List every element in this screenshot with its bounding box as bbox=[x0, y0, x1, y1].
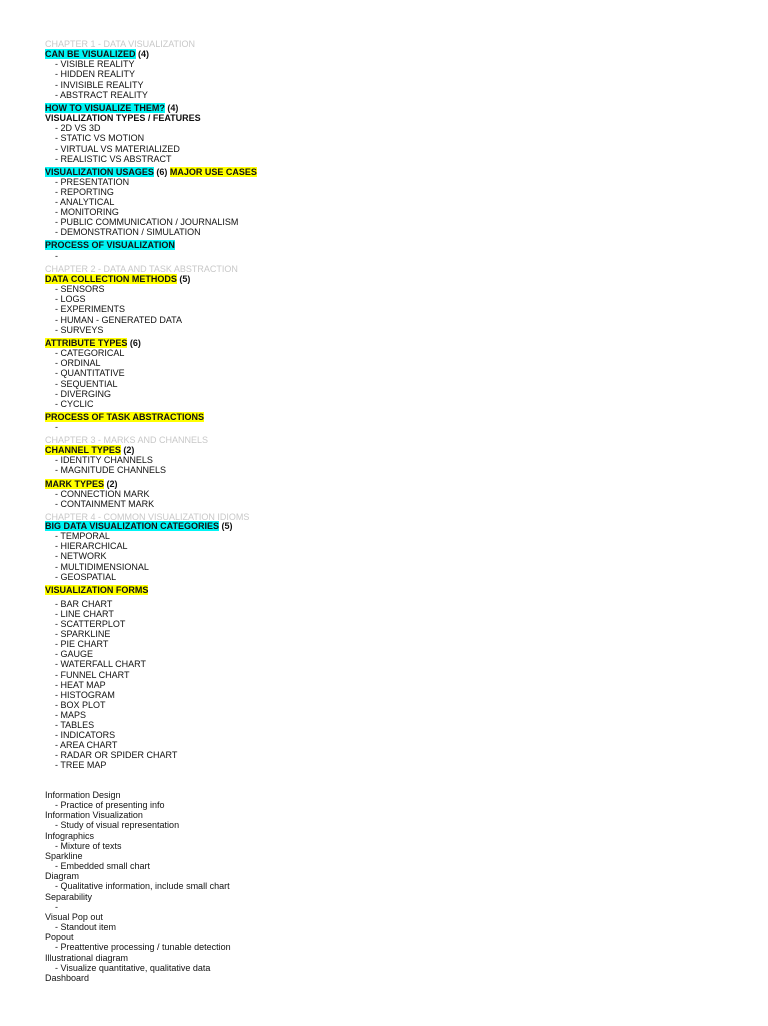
list: channels: - MAGNITUDE CHANNELS bbox=[55, 465, 166, 475]
heading: visualization types: VISUALIZATION TYPES / FEATURES bbox=[45, 113, 201, 123]
list: types: - REALISTIC VS ABSTRACT bbox=[55, 154, 172, 164]
section: glossary: - Mixture of texts bbox=[55, 841, 122, 851]
empty item: - bbox=[55, 251, 58, 261]
list: channels bbox=[55, 455, 166, 475]
list: forms: - RADAR OR SPIDER CHART bbox=[55, 750, 177, 760]
list: attributes bbox=[55, 348, 125, 409]
section: glossary: Diagram bbox=[45, 871, 79, 881]
section: glossary: - Visualize quantitative, qualitative data bbox=[55, 963, 210, 973]
list: forms: - BAR CHART bbox=[55, 599, 112, 609]
section: glossary: - Standout item bbox=[55, 922, 116, 932]
heading: mark types: MARK TYPES (2) bbox=[45, 479, 118, 489]
section: glossary: Separability bbox=[45, 892, 92, 902]
list: forms: - PIE CHART bbox=[55, 639, 108, 649]
list: types: - VIRTUAL VS MATERIALIZED bbox=[55, 144, 180, 154]
list: methods bbox=[55, 284, 182, 335]
section: glossary: Information Design bbox=[45, 790, 121, 800]
list: realities: - INVISIBLE REALITY bbox=[55, 80, 144, 90]
list: forms: - MAPS bbox=[55, 710, 86, 720]
heading: channel types: CHANNEL TYPES (2) bbox=[45, 445, 134, 455]
heading: usages: VISUALIZATION USAGES (6) MAJOR USE CASES bbox=[45, 167, 257, 177]
list: forms: - TREE MAP bbox=[55, 760, 106, 770]
section: glossary: Sparkline bbox=[45, 851, 83, 861]
section: glossary: Information Visualization bbox=[45, 810, 143, 820]
list: forms bbox=[55, 599, 178, 770]
list: attributes: - SEQUENTIAL bbox=[55, 379, 118, 389]
list: types: - 2D VS 3D bbox=[55, 123, 101, 133]
heading: can be visualized: CAN BE VISUALIZED (4) bbox=[45, 49, 149, 59]
list: types: - STATIC VS MOTION bbox=[55, 133, 144, 143]
section: glossary: - Study of visual representation bbox=[55, 820, 179, 830]
list: forms: - HISTOGRAM bbox=[55, 690, 115, 700]
list: forms: - TABLES bbox=[55, 720, 94, 730]
list: usages: - DEMONSTRATION / SIMULATION bbox=[55, 227, 201, 237]
list: usages: - ANALYTICAL bbox=[55, 197, 114, 207]
list: methods: - SENSORS bbox=[55, 284, 105, 294]
list: usages: - MONITORING bbox=[55, 207, 119, 217]
list: channels: - IDENTITY CHANNELS bbox=[55, 455, 153, 465]
list: forms: - WATERFALL CHART bbox=[55, 659, 146, 669]
list: marks: - CONTAINMENT MARK bbox=[55, 499, 154, 509]
list: forms: - GAUGE bbox=[55, 649, 93, 659]
list: usages: - PUBLIC COMMUNICATION / JOURNALISM bbox=[55, 217, 238, 227]
heading: attribute types: ATTRIBUTE TYPES (6) bbox=[45, 338, 141, 348]
list: categories: - MULTIDIMENSIONAL bbox=[55, 562, 149, 572]
list: usages bbox=[55, 177, 238, 237]
list: realities: - HIDDEN REALITY bbox=[55, 69, 135, 79]
section: chapter 4 bbox=[45, 512, 249, 770]
section: glossary: Illustrational diagram bbox=[45, 952, 128, 962]
list: forms: - BOX PLOT bbox=[55, 700, 106, 710]
list: marks bbox=[55, 489, 154, 509]
heading: big data categories: BIG DATA VISUALIZATION CATEGORIES (5) bbox=[45, 521, 232, 531]
section: glossary: Dashboard bbox=[45, 973, 89, 983]
chapter 4 title: CHAPTER 4 - COMMON VISUALIZATION IDIOMS bbox=[45, 512, 249, 522]
section: glossary: - bbox=[55, 902, 58, 912]
heading: process of task abstractions: PROCESS OF TASK ABSTRACTIONS bbox=[45, 412, 204, 422]
section: glossary: - Embedded small chart bbox=[55, 861, 150, 871]
section: chapter 3 bbox=[45, 435, 208, 509]
section: glossary bbox=[45, 790, 231, 983]
list: types bbox=[55, 123, 180, 164]
list: attributes: - CYCLIC bbox=[55, 399, 94, 409]
list: attributes: - ORDINAL bbox=[55, 358, 101, 368]
list: realities: - VISIBLE REALITY bbox=[55, 59, 135, 69]
list: forms: - INDICATORS bbox=[55, 730, 115, 740]
list: attributes: - QUANTITATIVE bbox=[55, 368, 125, 378]
section: chapter 2 bbox=[45, 264, 238, 432]
list: categories bbox=[55, 531, 149, 582]
section: glossary: Infographics bbox=[45, 831, 94, 841]
section: glossary: Popout bbox=[45, 932, 74, 942]
section: glossary: - Preattentive processing / tunable detection bbox=[55, 942, 231, 952]
list: categories: - HIERARCHICAL bbox=[55, 541, 128, 551]
section: glossary: - Practice of presenting info bbox=[55, 800, 165, 810]
list: marks: - CONNECTION MARK bbox=[55, 489, 150, 499]
section: glossary: Visual Pop out bbox=[45, 912, 103, 922]
heading: visualization forms: VISUALIZATION FORMS bbox=[45, 585, 148, 595]
list: forms: - SCATTERPLOT bbox=[55, 619, 125, 629]
list: methods: - EXPERIMENTS bbox=[55, 304, 125, 314]
list: methods: - SURVEYS bbox=[55, 325, 103, 335]
list: attributes: - DIVERGING bbox=[55, 389, 111, 399]
section: chapter 1 bbox=[45, 39, 257, 261]
chapter 2 title: CHAPTER 2 - DATA AND TASK ABSTRACTION bbox=[45, 264, 238, 274]
chapter 3 title: CHAPTER 3 - MARKS AND CHANNELS bbox=[45, 435, 208, 445]
heading: process of visualization: PROCESS OF VISUALIZATION bbox=[45, 240, 175, 250]
list: usages: - PRESENTATION bbox=[55, 177, 129, 187]
list: realities bbox=[55, 59, 148, 100]
list: methods: - LOGS bbox=[55, 294, 86, 304]
list: forms: - SPARKLINE bbox=[55, 629, 110, 639]
list: categories: - GEOSPATIAL bbox=[55, 572, 116, 582]
list: forms: - HEAT MAP bbox=[55, 680, 106, 690]
chapter 1 title: CHAPTER 1 - DATA VISUALIZATION bbox=[45, 39, 195, 49]
list: methods: - HUMAN - GENERATED DATA bbox=[55, 315, 182, 325]
list: usages: - REPORTING bbox=[55, 187, 114, 197]
heading: data collection: DATA COLLECTION METHODS (5) bbox=[45, 274, 190, 284]
list: forms: - AREA CHART bbox=[55, 740, 117, 750]
empty item: - bbox=[55, 422, 58, 432]
heading: how to visualize: HOW TO VISUALIZE THEM? (4) bbox=[45, 103, 178, 113]
list: forms: - LINE CHART bbox=[55, 609, 114, 619]
list: forms: - FUNNEL CHART bbox=[55, 670, 130, 680]
list: attributes: - CATEGORICAL bbox=[55, 348, 124, 358]
list: realities: - ABSTRACT REALITY bbox=[55, 90, 148, 100]
list: categories: - NETWORK bbox=[55, 551, 106, 561]
section: glossary: - Qualitative information, include small chart bbox=[55, 881, 230, 891]
list: categories: - TEMPORAL bbox=[55, 531, 110, 541]
